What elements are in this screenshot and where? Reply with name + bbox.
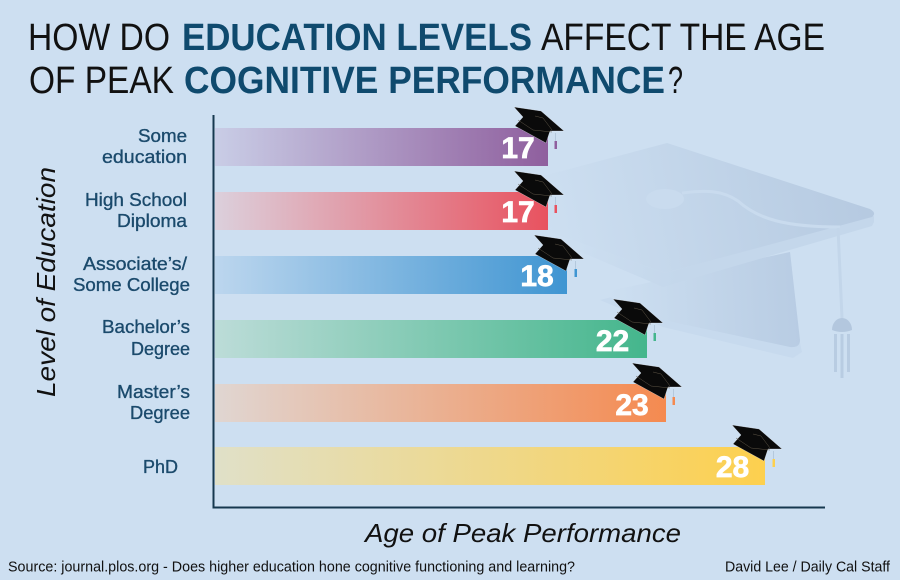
value: 17	[501, 196, 535, 229]
credit: David Lee / Daily Cal Staff	[725, 560, 891, 576]
value: 22	[596, 325, 629, 358]
value: 17	[501, 132, 535, 165]
y axis title: Level of Education	[31, 167, 61, 397]
bar	[215, 384, 666, 422]
category label	[117, 381, 190, 423]
bar row: Associate's / Some College 18	[73, 235, 584, 295]
bar	[215, 320, 647, 358]
title: COGNITIVE PERFORMANCE	[184, 60, 665, 102]
category label	[102, 125, 187, 167]
icon: graduation cap	[613, 299, 663, 341]
icon: graduation cap	[632, 363, 682, 405]
category label	[73, 253, 190, 295]
chart axes	[214, 115, 825, 508]
title: EDUCATION LEVELS	[182, 17, 532, 59]
category label: High School	[85, 189, 187, 210]
value: 18	[520, 260, 554, 293]
x axis title: Age of Peak Performance	[363, 518, 681, 548]
category label: PhD	[143, 456, 178, 477]
category label: Diploma	[117, 210, 188, 231]
value: 28	[716, 451, 749, 484]
source note: Source: journal.plos.org - Does higher education hone cognitive functioning and learning?	[8, 560, 575, 576]
category label	[102, 316, 190, 359]
category label: Degree	[130, 402, 190, 423]
bar	[215, 192, 548, 230]
category label: education	[102, 146, 187, 167]
icon: graduation cap	[514, 107, 564, 149]
title: AFFECT THE AGE	[541, 17, 825, 59]
category label	[85, 189, 188, 231]
category label: Associate’s/	[83, 253, 188, 274]
bar	[215, 447, 765, 485]
bar	[215, 128, 548, 166]
bar	[215, 256, 567, 294]
icon: graduation cap	[514, 171, 564, 213]
title: ?	[668, 60, 683, 102]
bar row: Bachelor's Degree 22	[102, 299, 663, 359]
icon: graduation cap	[732, 425, 782, 467]
value: 23	[615, 389, 649, 422]
category label: Degree	[131, 338, 190, 359]
title: OF PEAK	[29, 60, 174, 102]
category label: Some College	[73, 274, 190, 295]
icon: large faded graduation cap	[457, 143, 874, 378]
category label: Master’s	[117, 381, 190, 402]
category label: Bachelor’s	[102, 316, 190, 337]
title	[28, 17, 825, 102]
bar row: Master's Degree 23	[117, 363, 682, 423]
title: HOW DO	[28, 17, 170, 59]
icon: graduation cap	[534, 235, 584, 277]
bar row: Some education 17	[102, 107, 564, 167]
category label: Some	[138, 125, 187, 146]
bar row: High School Diploma 17	[85, 171, 564, 231]
bar row: PhD 28	[143, 425, 782, 485]
